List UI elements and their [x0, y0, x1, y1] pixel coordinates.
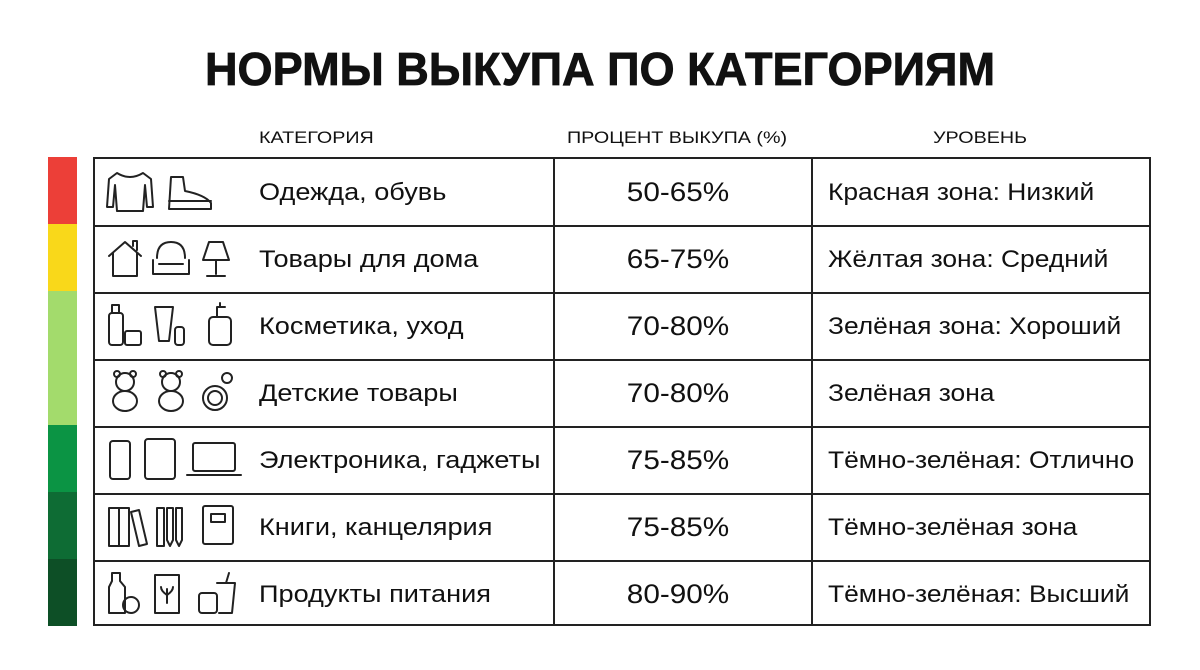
- row 1: clothing: Одежда, обувь: [259, 179, 446, 206]
- header: level: УРОВЕНЬ: [933, 128, 1027, 147]
- row 6: books: 75-85%: [627, 512, 729, 542]
- row 5: electronics: Электроника, гаджеты: [259, 447, 540, 474]
- row 2: home: 65-75%: [627, 244, 729, 274]
- row 3: cosmetics: Косметика, уход: [259, 313, 464, 340]
- row 1: clothing: [106, 172, 1094, 212]
- row 6: books: [108, 505, 1078, 547]
- row 4: kids: Детские товары: [259, 380, 458, 407]
- row 6: books: Книги, канцелярия: [259, 514, 492, 541]
- row 6: books: Тёмно-зелёная зона: [828, 514, 1077, 541]
- header: percent: ПРОЦЕНТ ВЫКУПА (%): [567, 128, 787, 147]
- row 1: clothing: Красная зона: Низкий: [828, 179, 1094, 206]
- row 3: cosmetics: [108, 302, 1121, 346]
- row 3: cosmetics: Зелёная зона: Хороший: [828, 313, 1121, 340]
- row 4: kids: Зелёная зона: [828, 380, 994, 407]
- icons: house, armchair, lamp: [108, 240, 230, 277]
- row 2: home: Товары для дома: [259, 246, 478, 273]
- row 1: clothing: 50-65%: [627, 177, 729, 207]
- icons: phone, tablet, laptop: [109, 438, 242, 480]
- row 5: electronics: [109, 438, 1134, 480]
- row 7: food: Тёмно-зелёная: Высший: [828, 581, 1129, 608]
- row 3: cosmetics: 70-80%: [627, 311, 729, 341]
- row 7: food: Продукты питания: [259, 581, 491, 608]
- icons: milk, snack bag, jar & cup: [108, 572, 236, 614]
- table: [93, 157, 1151, 626]
- row 5: electronics: 75-85%: [627, 445, 729, 475]
- icons: binders, pencils, book: [108, 505, 234, 547]
- row 2: home: [108, 240, 1108, 277]
- row 7: food: 80-90%: [627, 579, 729, 609]
- row 4: kids: 70-80%: [627, 378, 729, 408]
- icons: sweater, shoe: [106, 172, 212, 212]
- row 2: home: Жёлтая зона: Средний: [828, 246, 1108, 273]
- title: НОРМЫ ВЫКУПА ПО КАТЕГОРИЯМ: [205, 43, 995, 95]
- row 5: electronics: Тёмно-зелёная: Отлично: [828, 447, 1134, 474]
- color scale bar: [48, 157, 77, 626]
- icons: teddy bears, pacifier: [112, 370, 233, 412]
- row 7: food: [108, 572, 1129, 614]
- icons: bottles, tube, pump: [108, 302, 232, 346]
- row 4: kids: [112, 370, 994, 412]
- header: category: КАТЕГОРИЯ: [259, 128, 374, 147]
